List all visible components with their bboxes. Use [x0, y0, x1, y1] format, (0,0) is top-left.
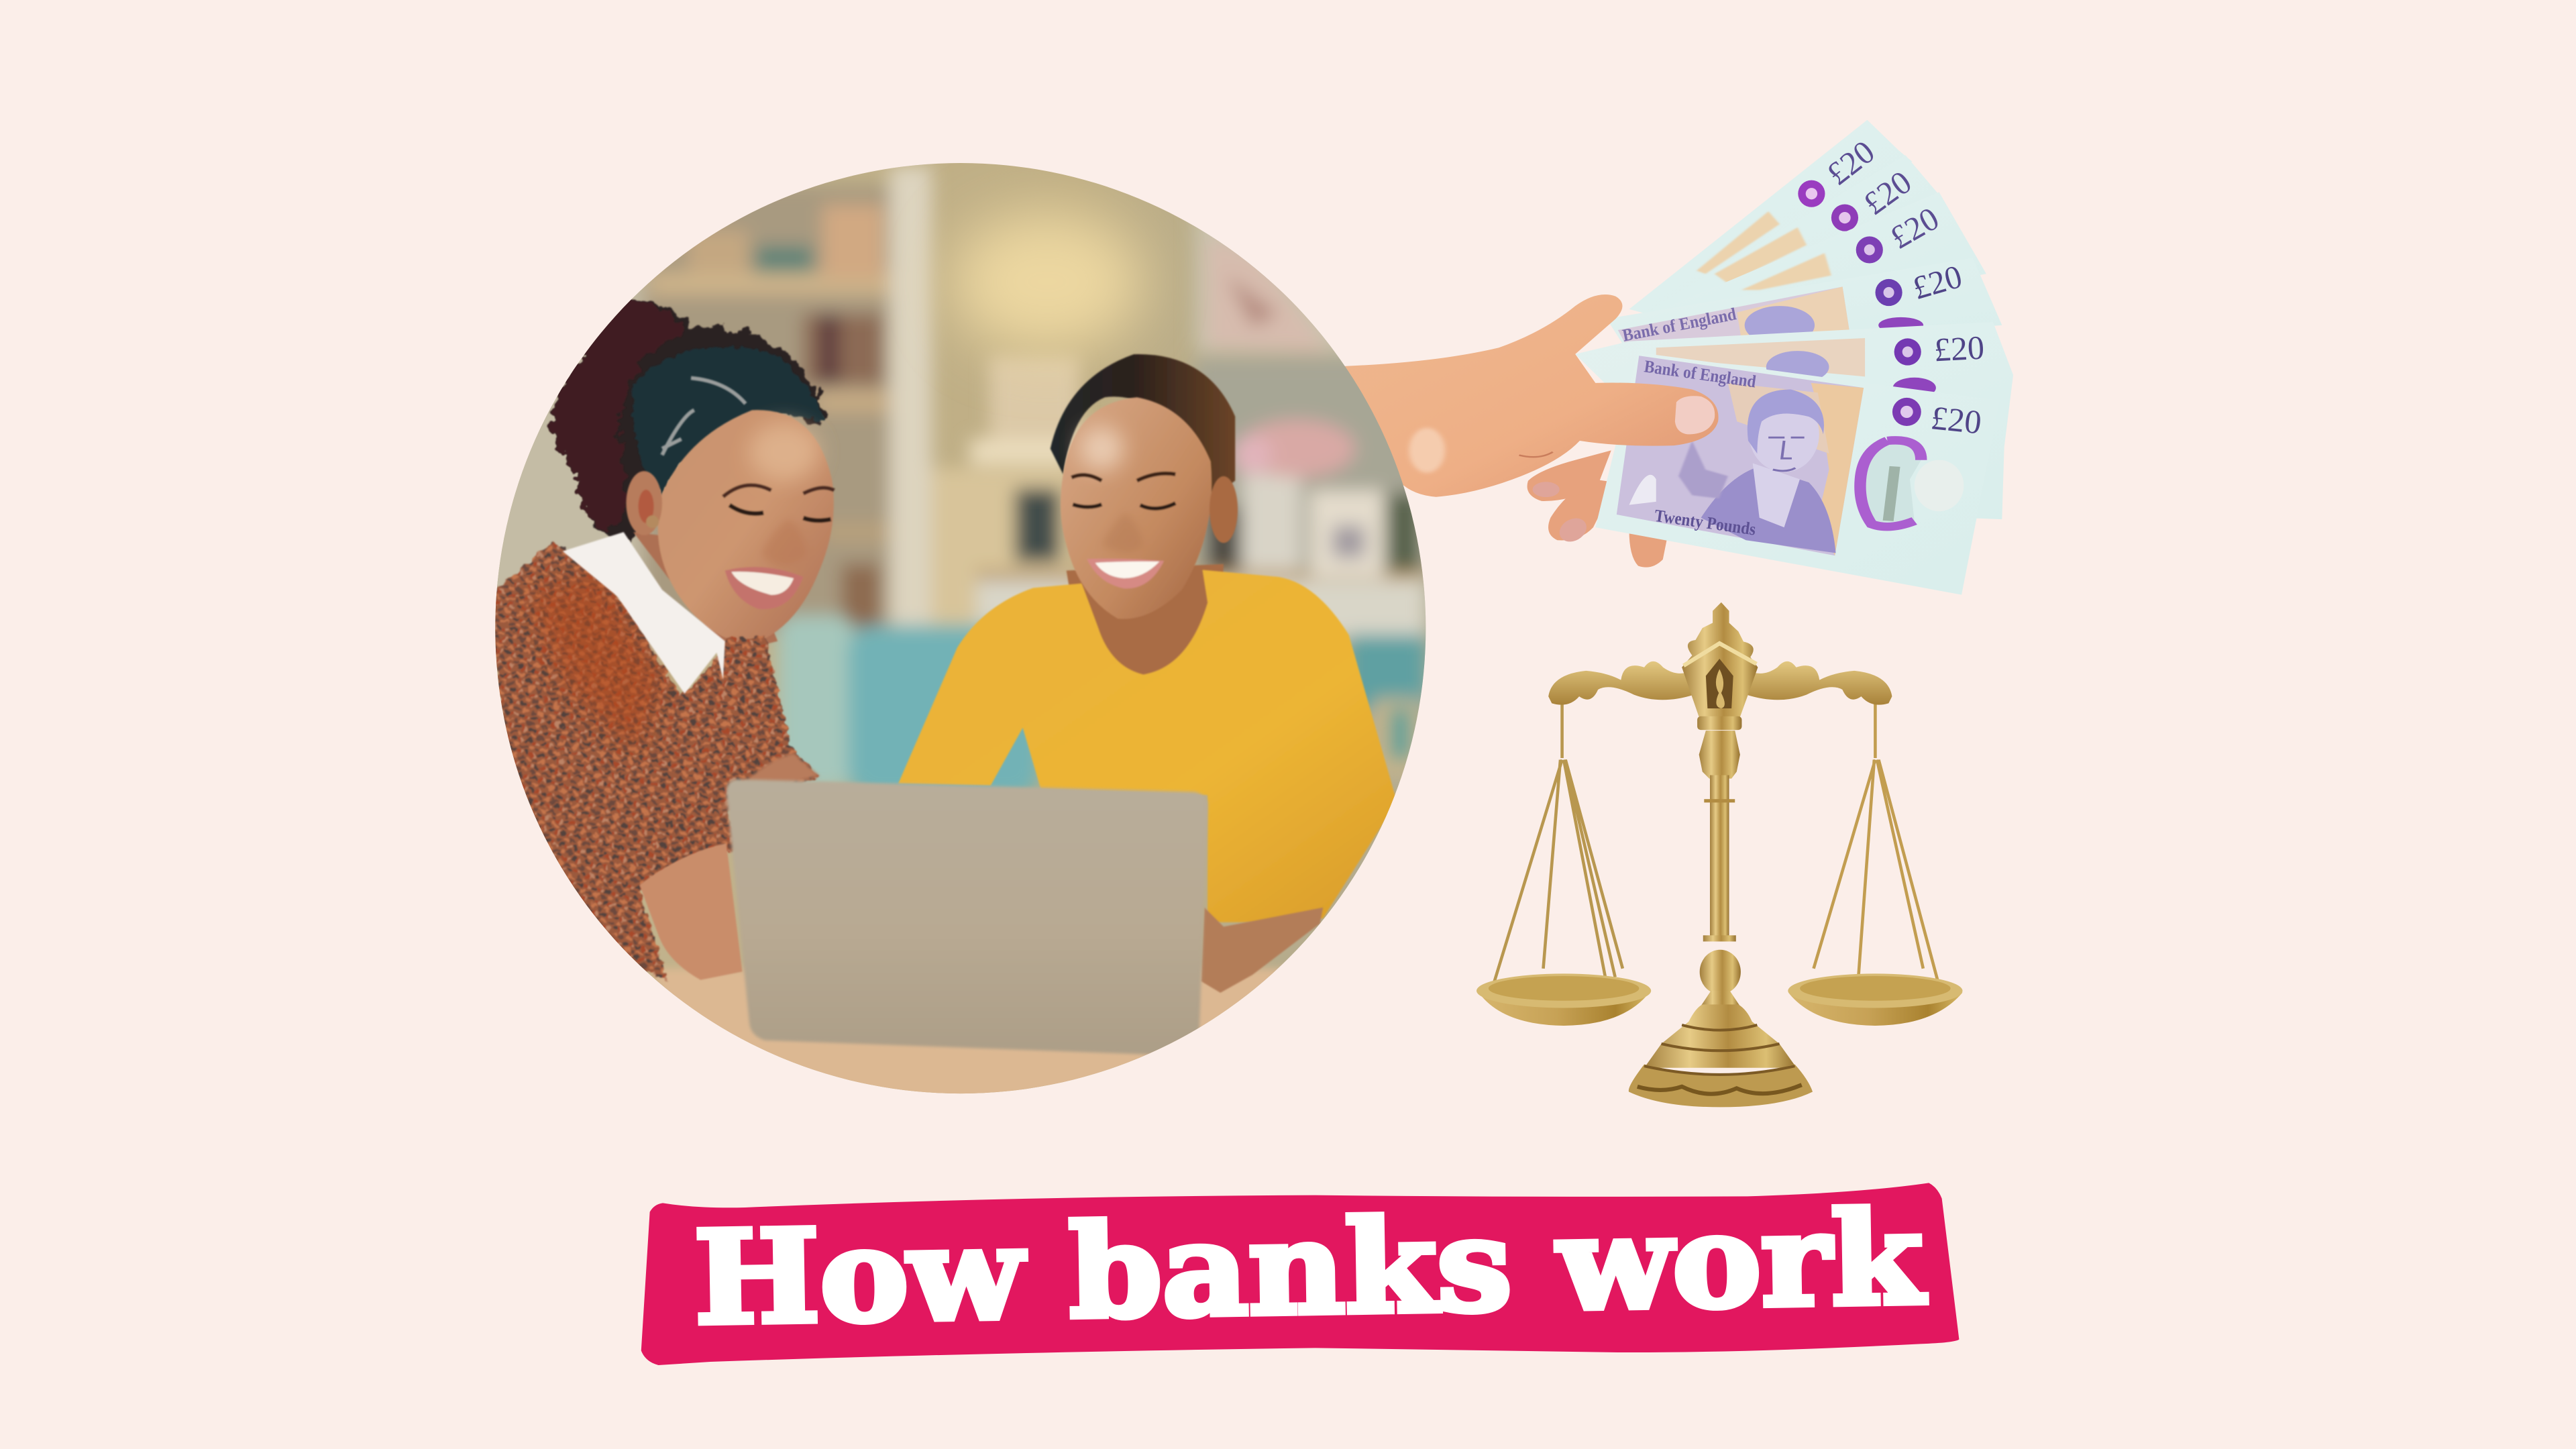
rear banknote 1 [1629, 120, 1912, 319]
main banknote: £20 [1929, 398, 1983, 441]
daughter hand [1201, 908, 1323, 993]
right scale pan with chains [1788, 700, 1963, 1026]
ornate beam [1548, 661, 1892, 705]
mother forearm and far hand [716, 753, 819, 814]
photo: mother and daughter at laptop [495, 163, 1426, 1093]
daughter head [1061, 397, 1238, 619]
mother hair [552, 301, 826, 545]
banner brush shape [641, 1183, 1959, 1365]
crown [1682, 602, 1758, 717]
blurred living room background [495, 163, 1426, 1093]
rear banknote 3 [1670, 192, 1986, 325]
icon: hand holding banknotes [1324, 120, 2013, 595]
rear banknote 3: £20 [1884, 200, 1945, 256]
hand and thumb [1324, 294, 1719, 497]
rear banknote 1: £20 [1820, 133, 1882, 193]
portrait on banknote [1701, 389, 1836, 553]
lower fingers [1527, 450, 1667, 568]
laptop [727, 779, 1208, 1056]
mother hand [639, 843, 743, 980]
rear banknote 2 [1652, 155, 1943, 325]
mother head [626, 410, 834, 654]
daughter hair [1051, 354, 1235, 500]
main banknote [1595, 352, 2000, 595]
rear banknote 5: £20 [1933, 329, 1985, 368]
rear banknote 4: Bank of England [1621, 304, 1738, 345]
title banner [641, 1183, 1959, 1365]
main banknote: Twenty Pounds [1654, 506, 1757, 539]
base [1629, 950, 1813, 1107]
left scale pan with chains [1477, 700, 1651, 1026]
rear banknote 2: £20 [1857, 163, 1918, 222]
main banknote: Bank of England [1643, 356, 1758, 392]
rear banknote 5 [1575, 322, 2013, 519]
daughter neck [1067, 564, 1224, 686]
mother white collar [563, 532, 725, 694]
column [1697, 716, 1741, 941]
icon: gold balance scales [1477, 602, 1963, 1107]
mother sweater [489, 541, 819, 981]
rear banknote 4 [1607, 258, 2002, 354]
daughter shirt [898, 570, 1397, 922]
title text: How banks work [693, 1183, 1927, 1353]
rear banknote 4: £20 [1909, 258, 1966, 307]
blurred table [651, 966, 1280, 1093]
security window [1860, 440, 1964, 527]
